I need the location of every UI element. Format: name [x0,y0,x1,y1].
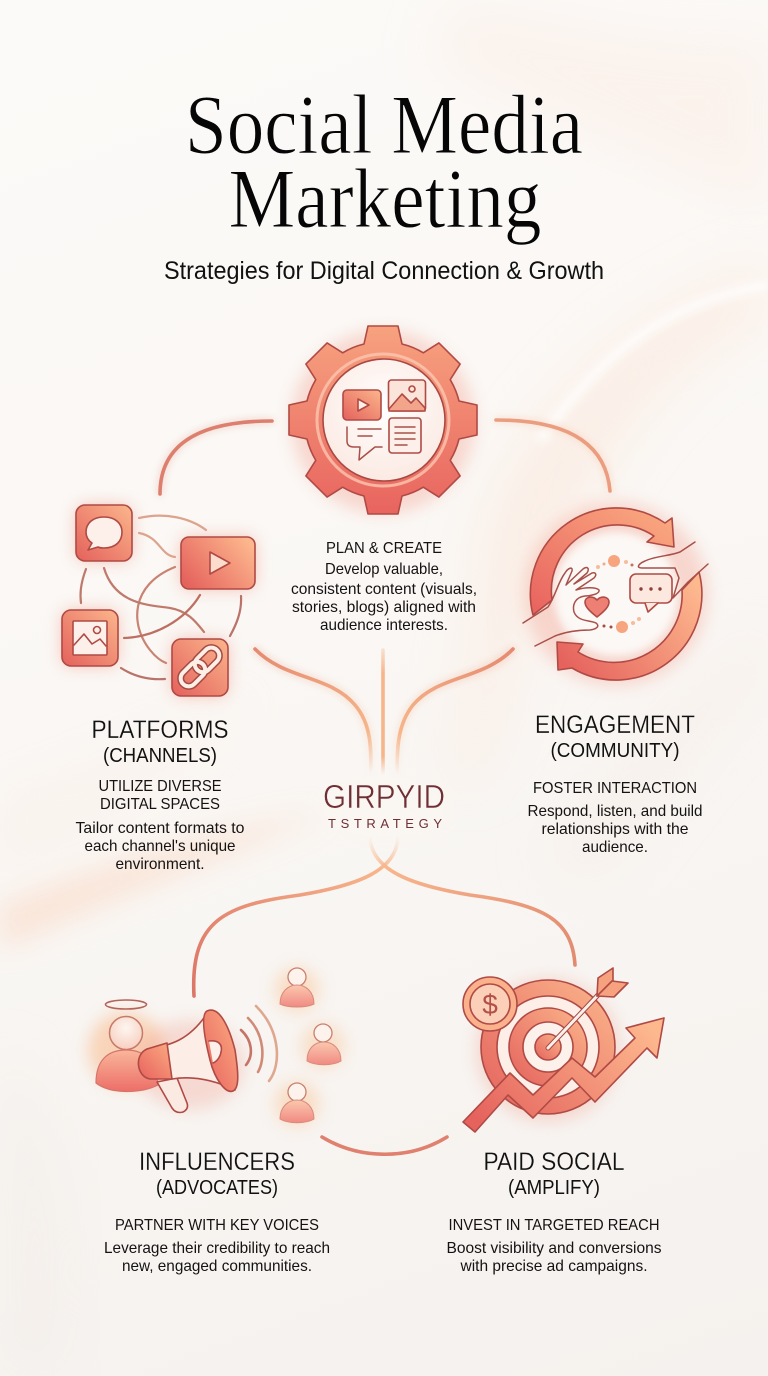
heading: engagement: ENGAGEMENT [535,711,695,739]
heading: influencers: (ADVOCATES) [156,1177,278,1199]
heading: engagement [535,711,695,762]
text: plan and create body [291,561,477,634]
heading: paid social: PAID SOCIAL [484,1148,625,1176]
title [185,78,583,246]
central logo: TSTRATEGY [328,816,442,831]
text: influencers body: new, engaged communities. [122,1258,312,1275]
heading: platforms: (CHANNELS) [103,745,217,767]
central logo: GIRPYID [323,778,445,815]
text: plan and create body: Develop valuable, [325,561,443,578]
text: paid social body: INVEST IN TARGETED REACH [448,1217,660,1234]
icon: gear [289,326,477,514]
text: plan and create body: consistent content (visuals, [291,581,477,598]
title: Social Media [185,78,583,172]
connectors: top arcs [160,420,610,494]
panel: engagement [523,502,708,856]
heading: influencers [139,1148,295,1199]
text: platforms body [76,778,245,873]
heading: plan and create: PLAN & CREATE [326,540,442,557]
panel: influencers [88,968,345,1275]
text: platforms body: each channel's unique [84,838,236,855]
text: engagement body: FOSTER INTERACTION [533,780,697,797]
subtitle: Strategies for Digital Connection & Growth [164,257,604,285]
icon: target with growth arrow: $ [482,989,498,1020]
heading: platforms: PLATFORMS [92,716,228,744]
text: plan and create body: audience interests. [320,617,448,634]
text: engagement body: relationships with the [542,821,689,838]
panel: paid social [446,968,664,1275]
heading: engagement: (COMMUNITY) [550,740,680,762]
text: platforms body: DIGITAL SPACES [100,796,220,813]
text: paid social body: Boost visibility and conversions [446,1240,662,1257]
heading: influencers: INFLUENCERS [139,1148,295,1176]
title: Marketing [228,152,542,246]
heading: paid social: (AMPLIFY) [508,1177,600,1199]
text: engagement body [528,780,702,856]
panel: platforms [62,505,255,873]
text: platforms body: environment. [116,856,204,873]
icon: audience people [275,968,345,1126]
icon: influencer with megaphone [88,1000,277,1112]
connectors: flows into centre [255,649,513,776]
text: platforms body: UTILIZE DIVERSE [98,778,222,795]
text: paid social body: with precise ad campaigns. [460,1258,648,1275]
panel: plan and create [289,326,477,634]
text: engagement body: Respond, listen, and build [528,803,702,820]
text: engagement body: audience. [582,839,648,856]
text: paid social body [446,1217,662,1275]
central logo [322,778,446,836]
icon: platform network [62,505,255,696]
text: influencers body: Leverage their credibility to reach [104,1240,330,1257]
text: influencers body: PARTNER WITH KEY VOICES [115,1217,319,1234]
text: influencers body [104,1217,330,1275]
icon: engagement cycle [523,502,708,686]
text: platforms body: Tailor content formats to [76,820,245,837]
text: plan and create body: stories, blogs) aligned with [292,599,476,616]
heading: platforms [92,716,228,767]
connector: bottom arc [322,1137,447,1154]
icon: target with growth arrow [463,968,664,1132]
heading: paid social [484,1148,625,1199]
connectors: flows out of centre [194,838,575,996]
